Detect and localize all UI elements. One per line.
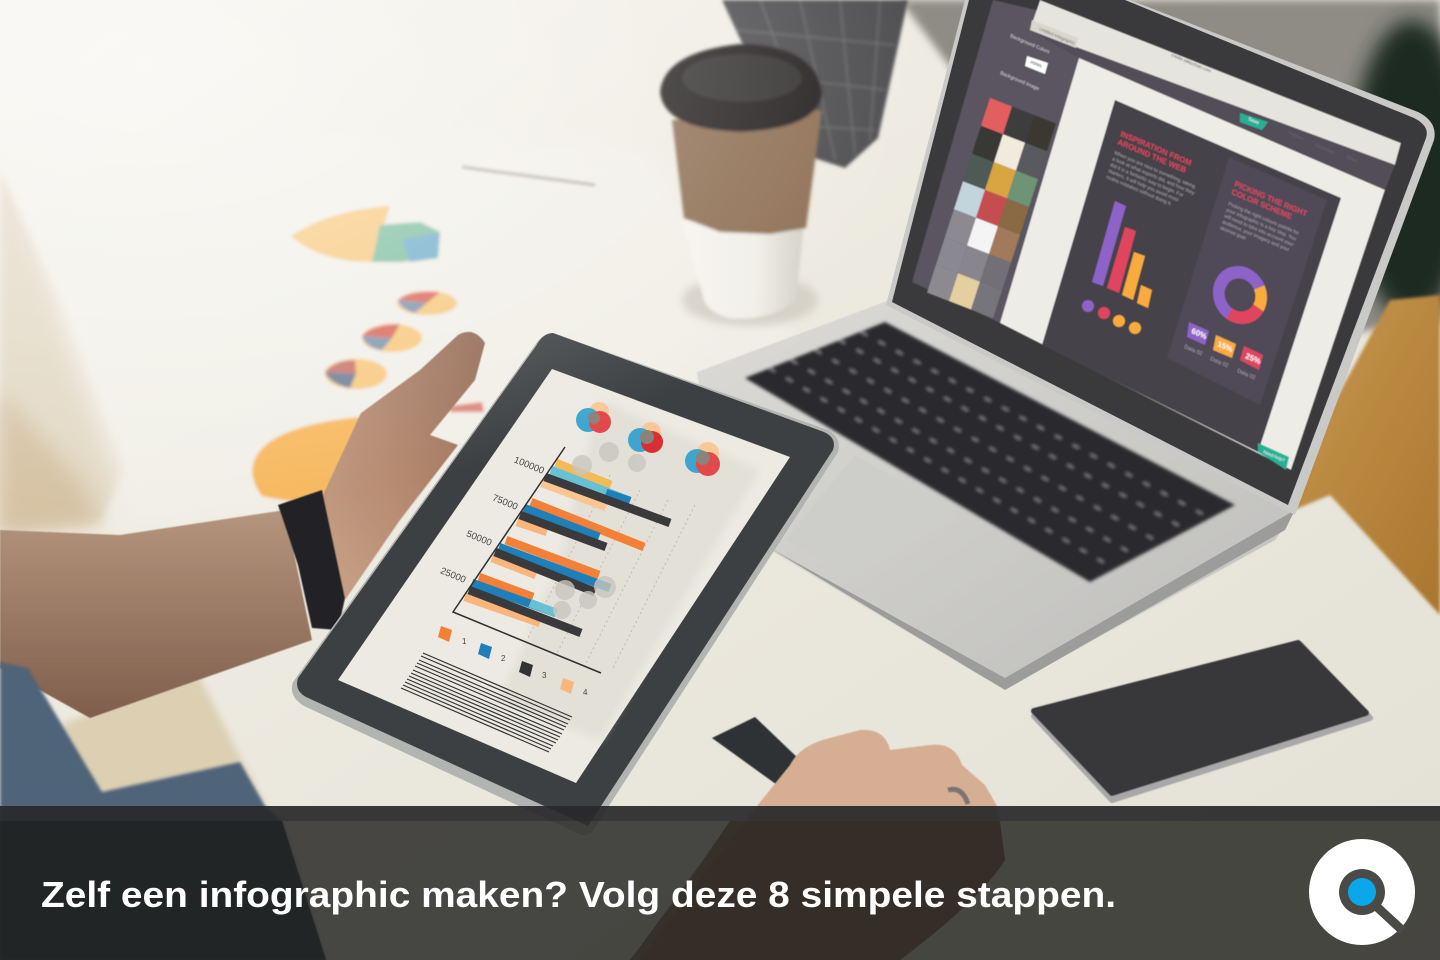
heading: color scheme: PICKING THE RIGHT bbox=[1233, 179, 1308, 219]
data label 25 percent bbox=[1236, 346, 1263, 381]
chart bars bbox=[465, 463, 670, 633]
striped text block bbox=[401, 653, 572, 752]
body text one: When you are new to something, taking bbox=[1113, 150, 1196, 190]
chart legend: 3 bbox=[542, 671, 547, 680]
bubble charts bbox=[576, 402, 720, 476]
ring bbox=[948, 789, 968, 804]
browser bar bbox=[1030, 0, 1401, 165]
data label 60 percent: Data 02 bbox=[1183, 344, 1203, 357]
body text two: your infographic is a key step. You bbox=[1225, 207, 1297, 243]
donut chart bbox=[1203, 253, 1277, 337]
smartphone bbox=[1034, 643, 1370, 800]
data label 60 percent bbox=[1183, 322, 1209, 357]
toolbar labels: Preview bbox=[1288, 130, 1305, 141]
small bars bbox=[450, 402, 484, 412]
logo: magnifier bbox=[1309, 839, 1415, 945]
toolbar labels: Share bbox=[1346, 154, 1359, 164]
jeans bbox=[0, 662, 326, 960]
banner body bbox=[0, 821, 1440, 960]
pencil bbox=[462, 167, 595, 185]
white canvas bbox=[1000, 58, 1385, 470]
laptop screen bbox=[912, 0, 1401, 470]
heading: inspiration: INSPIRATION FROM bbox=[1119, 129, 1193, 168]
data label 15 percent: 15% bbox=[1216, 339, 1234, 354]
wall behind laptop bbox=[900, 0, 1440, 340]
dark lower left corner bbox=[0, 821, 326, 960]
background swatches bbox=[927, 98, 1056, 318]
arm shadow through banner bbox=[630, 821, 1005, 960]
map shadow bbox=[500, 400, 760, 740]
body text one: did it is a fantastic way to begin. For bbox=[1109, 162, 1184, 199]
trackpad bbox=[785, 455, 960, 577]
y axis labels: 50000 bbox=[465, 529, 493, 549]
sidebar heading: Background Colors bbox=[1009, 33, 1051, 56]
chart axes bbox=[453, 447, 601, 673]
body text two: Picking the right colours palette for bbox=[1227, 201, 1300, 237]
large pie bottom bbox=[252, 416, 375, 505]
hand on mouse bbox=[640, 730, 1005, 960]
banner top strip bbox=[0, 806, 1440, 821]
toolbar labels: Download bbox=[1315, 142, 1335, 155]
body text one: starters, it will help you avoid most bbox=[1107, 168, 1180, 204]
paper sheet bbox=[0, 120, 800, 525]
usb ruler device bbox=[712, 717, 802, 787]
body text two: will need to take into account your bbox=[1223, 213, 1295, 248]
forearm bbox=[0, 510, 312, 718]
save button bbox=[1240, 113, 1268, 130]
screen bar chart bbox=[1092, 201, 1152, 308]
social icons bbox=[1082, 300, 1141, 334]
color code: #f9f9f3 bbox=[1030, 59, 1043, 69]
data label 25 percent: 25% bbox=[1244, 351, 1262, 366]
tab label: Untitled Infographic bbox=[1039, 26, 1076, 46]
pen holder bbox=[722, 0, 908, 168]
chart legend bbox=[438, 626, 588, 697]
watch band bbox=[278, 490, 345, 630]
front edge bbox=[770, 510, 1295, 690]
laptop base bbox=[697, 300, 1295, 688]
body text one: a look at what experts did, and how they bbox=[1111, 156, 1195, 197]
laptop screen: AROUND THE WEB bbox=[1116, 137, 1187, 175]
color code bbox=[1025, 56, 1048, 74]
floor below arm bbox=[60, 672, 265, 806]
small pie 3 bbox=[325, 359, 387, 389]
wooden floor right bbox=[1270, 295, 1440, 615]
body text two bbox=[1219, 201, 1300, 253]
laptop lid bbox=[886, 0, 1435, 515]
y axis labels: 25000 bbox=[439, 566, 467, 586]
small pie 2 bbox=[362, 324, 422, 352]
y axis labels: 100000 bbox=[512, 455, 546, 477]
editor sidebar bbox=[912, 0, 1079, 323]
map pins bbox=[553, 442, 646, 619]
body text two: audience, your imagery and your bbox=[1221, 219, 1290, 253]
tablet screen bbox=[338, 369, 790, 783]
body text one bbox=[1105, 150, 1196, 207]
chart legend: 1 bbox=[462, 637, 467, 646]
data label 15 percent bbox=[1209, 335, 1236, 369]
cup lower body bbox=[682, 222, 804, 319]
cup shadow bbox=[682, 274, 818, 326]
need help button: Need help? bbox=[1263, 449, 1286, 463]
save button: Save bbox=[1247, 116, 1260, 126]
curtain and floor left bbox=[0, 170, 125, 530]
hand bbox=[322, 332, 485, 600]
chart legend: 2 bbox=[501, 654, 506, 663]
y axis labels: 75000 bbox=[491, 493, 519, 513]
title: Zelf een infographic maken? Volg deze 8 simpele stappen. bbox=[41, 874, 1116, 915]
coffee cup bbox=[660, 44, 822, 326]
large pie top bbox=[291, 206, 440, 262]
arm and hand bbox=[0, 332, 485, 718]
papers with pie charts bbox=[0, 120, 800, 525]
chart legend: 4 bbox=[583, 688, 588, 697]
toolbar labels bbox=[1288, 130, 1359, 164]
plant bbox=[1352, 20, 1440, 320]
toolbar bbox=[1030, 30, 1395, 190]
body text two: desired goal. bbox=[1219, 225, 1247, 242]
keyboard bbox=[745, 322, 1235, 582]
y axis labels bbox=[439, 455, 546, 586]
cup sleeve bbox=[672, 110, 822, 234]
dark infographic page bbox=[1042, 100, 1341, 452]
laptop bbox=[697, 0, 1435, 690]
small pie 1 bbox=[397, 291, 457, 315]
tab label bbox=[1030, 20, 1078, 48]
lighter panel bbox=[1167, 157, 1327, 405]
need help button bbox=[1258, 443, 1289, 470]
data label 25 percent: Data 02 bbox=[1236, 368, 1256, 381]
tablet bbox=[292, 333, 839, 835]
data label 15 percent: Data 02 bbox=[1209, 356, 1229, 369]
tablet frame bbox=[292, 333, 839, 835]
chart grid lines bbox=[527, 475, 695, 670]
url label: create.piktochart.com bbox=[1171, 52, 1212, 74]
data label 60 percent: 60% bbox=[1190, 326, 1208, 341]
cup lid bbox=[660, 44, 822, 132]
laptop screen: COLOR SCHEME bbox=[1230, 187, 1294, 222]
body text one: rookie mistakes without doing it. bbox=[1105, 174, 1172, 207]
background image heading: Background Image bbox=[999, 70, 1040, 92]
